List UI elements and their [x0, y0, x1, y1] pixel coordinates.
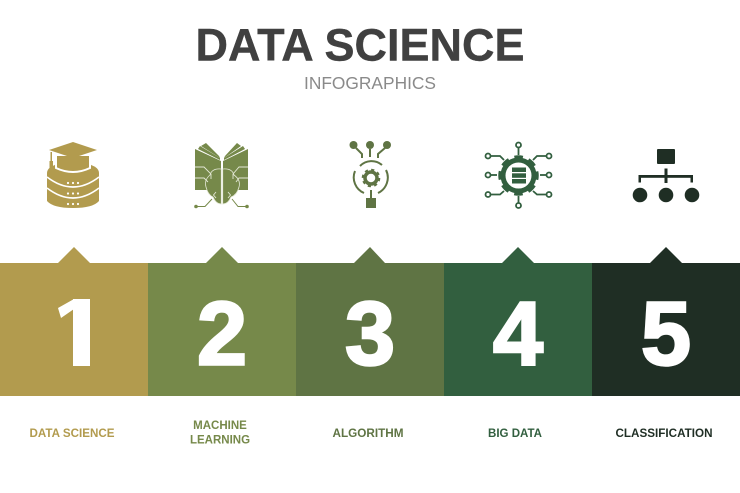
title: DATA SCIENCE [196, 20, 524, 70]
icon: algorithm gear [350, 141, 391, 208]
number 1: 1 [52, 284, 102, 384]
icon: hierarchy [633, 149, 699, 202]
panel 1 [0, 247, 148, 396]
label: machine learning [190, 420, 250, 446]
subtitle: INFOGRAPHICS [304, 73, 436, 93]
icon: graduation cap on database [47, 142, 99, 208]
label: algorithm: ALGORITHM [332, 428, 404, 440]
number 4: 4 [493, 284, 543, 384]
panel 2 [148, 247, 296, 396]
panel 5 [592, 247, 740, 396]
icon: big data gear [486, 142, 552, 208]
label: big data: BIG DATA [488, 428, 542, 440]
icon: book with brain [194, 143, 249, 208]
number 2: 2 [197, 284, 247, 384]
number 3: 3 [345, 284, 395, 384]
panel 3 [296, 247, 444, 396]
panel 4 [444, 247, 592, 396]
label: classification: CLASSIFICATION [616, 428, 712, 440]
label: data science: DATA SCIENCE [30, 428, 115, 440]
label: machine learning: LEARNING [190, 434, 250, 446]
number 5: 5 [641, 284, 691, 384]
label: machine learning: MACHINE [193, 420, 247, 432]
